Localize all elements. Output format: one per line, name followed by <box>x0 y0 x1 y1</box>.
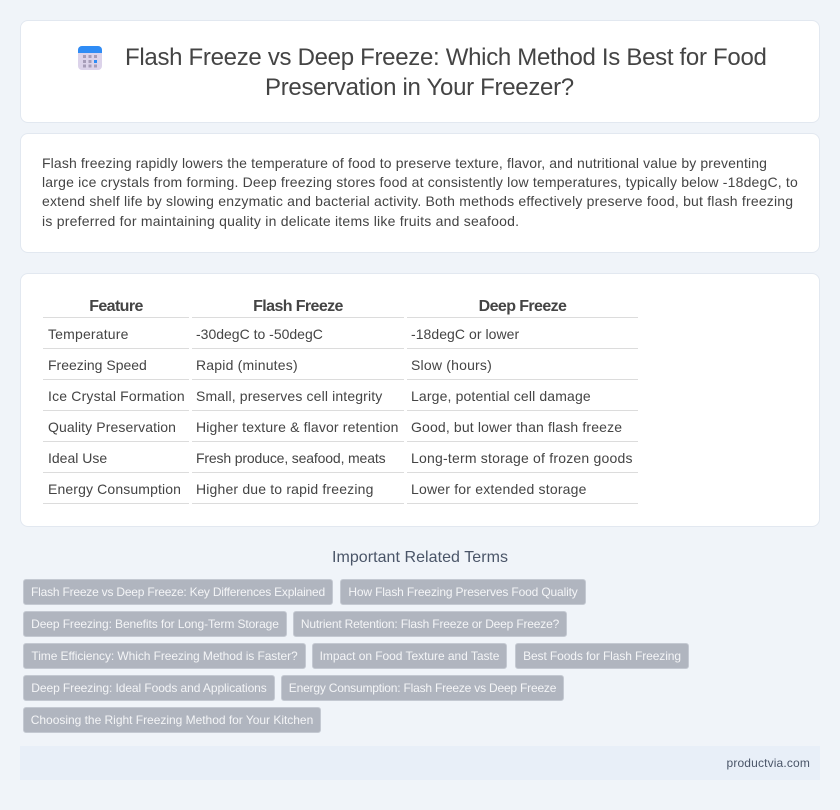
table header: Feature <box>89 298 143 315</box>
table row: ideal use: Ideal Use <box>48 450 107 466</box>
title <box>125 44 767 101</box>
table row: temperature: Temperature <box>48 326 129 342</box>
table row: quality preservation: Quality Preservation <box>48 419 176 435</box>
table row: freezing speed: Rapid (minutes) <box>196 357 298 373</box>
panel: header <box>20 20 820 123</box>
tag <box>293 611 567 637</box>
text block: introduction: Flash freezing rapidly lowers the temperature of food to preserve texture, flavor, and nutritional value by preventing <box>42 155 767 171</box>
table row: quality preservation: Higher texture & flavor retention <box>196 419 399 435</box>
tag: Nutrient Retention: Flash Freeze or Deep Freeze? <box>301 617 559 631</box>
tag: Impact on Food Texture and Taste <box>320 649 499 663</box>
panel: introduction <box>20 133 820 253</box>
table row: temperature: -18degC or lower <box>411 326 519 342</box>
tag <box>23 611 287 637</box>
table row: freezing speed <box>48 357 492 373</box>
comparison table <box>43 298 638 504</box>
tag: Deep Freezing: Ideal Foods and Applications <box>31 681 267 695</box>
table row: ideal use: Long-term storage of frozen goods <box>411 450 633 466</box>
table row: ideal use <box>48 450 633 466</box>
text block: introduction: is preferred for maintaining quality in delicate items like fruits and seafood. <box>42 213 519 229</box>
table row: quality preservation: Good, but lower than flash freeze <box>411 419 622 435</box>
table row: ice crystal formation: Large, potential cell damage <box>411 388 591 404</box>
table row: ice crystal formation: Ice Crystal Formation <box>48 388 185 404</box>
tag: Time Efficiency: Which Freezing Method is Faster? <box>31 649 298 663</box>
table row: temperature <box>48 326 519 342</box>
table row: temperature: -30degC to -50degC <box>196 326 323 342</box>
tag <box>515 643 689 669</box>
tag <box>23 579 333 605</box>
text block: introduction: large ice crystals from forming. Deep freezing stores food at consistently low temperatures, typically below -18degC, to <box>42 174 798 190</box>
table row: ice crystal formation: Small, preserves cell integrity <box>196 388 382 404</box>
panel: comparison table <box>20 273 820 527</box>
footer source text: productvia.com <box>727 756 810 770</box>
table header: Deep Freeze <box>479 298 566 315</box>
tag: Deep Freezing: Benefits for Long-Term Storage <box>31 617 279 631</box>
tag: Flash Freeze vs Deep Freeze: Key Differences Explained <box>31 585 325 599</box>
heading: related terms: Important Related Terms <box>332 549 508 566</box>
related terms tags <box>23 579 689 733</box>
tag <box>312 643 507 669</box>
table row: energy consumption: Higher due to rapid freezing <box>196 481 374 497</box>
table row: ideal use: Fresh produce, seafood, meats <box>196 450 385 466</box>
table row: energy consumption: Lower for extended storage <box>411 481 587 497</box>
icon: calendar grid <box>78 46 102 70</box>
table header <box>89 298 566 315</box>
tag <box>23 675 275 701</box>
tag: Best Foods for Flash Freezing <box>523 649 681 663</box>
tag <box>23 707 321 733</box>
table row: ice crystal formation <box>48 388 591 404</box>
table header: Flash Freeze <box>253 298 343 315</box>
tag: Energy Consumption: Flash Freeze vs Deep Freeze <box>289 681 556 695</box>
tag <box>23 643 306 669</box>
table row: freezing speed: Freezing Speed <box>48 357 147 373</box>
tag <box>281 675 564 701</box>
text block: introduction: extend shelf life by slowing enzymatic and bacterial activity. Both methods effectively preserve food, but flash freezing <box>42 193 793 209</box>
tag <box>340 579 586 605</box>
table row: energy consumption: Energy Consumption <box>48 481 181 497</box>
tag: How Flash Freezing Preserves Food Quality <box>348 585 578 599</box>
table row: energy consumption <box>48 481 587 497</box>
table row: freezing speed: Slow (hours) <box>411 357 492 373</box>
table row: quality preservation <box>48 419 622 435</box>
title: Flash Freeze vs Deep Freeze: Which Method Is Best for Food <box>125 44 767 71</box>
footer bar <box>20 746 820 780</box>
tag: Choosing the Right Freezing Method for Your Kitchen <box>31 713 313 727</box>
text block: introduction <box>42 155 798 229</box>
title: Preservation in Your Freezer? <box>265 74 574 101</box>
